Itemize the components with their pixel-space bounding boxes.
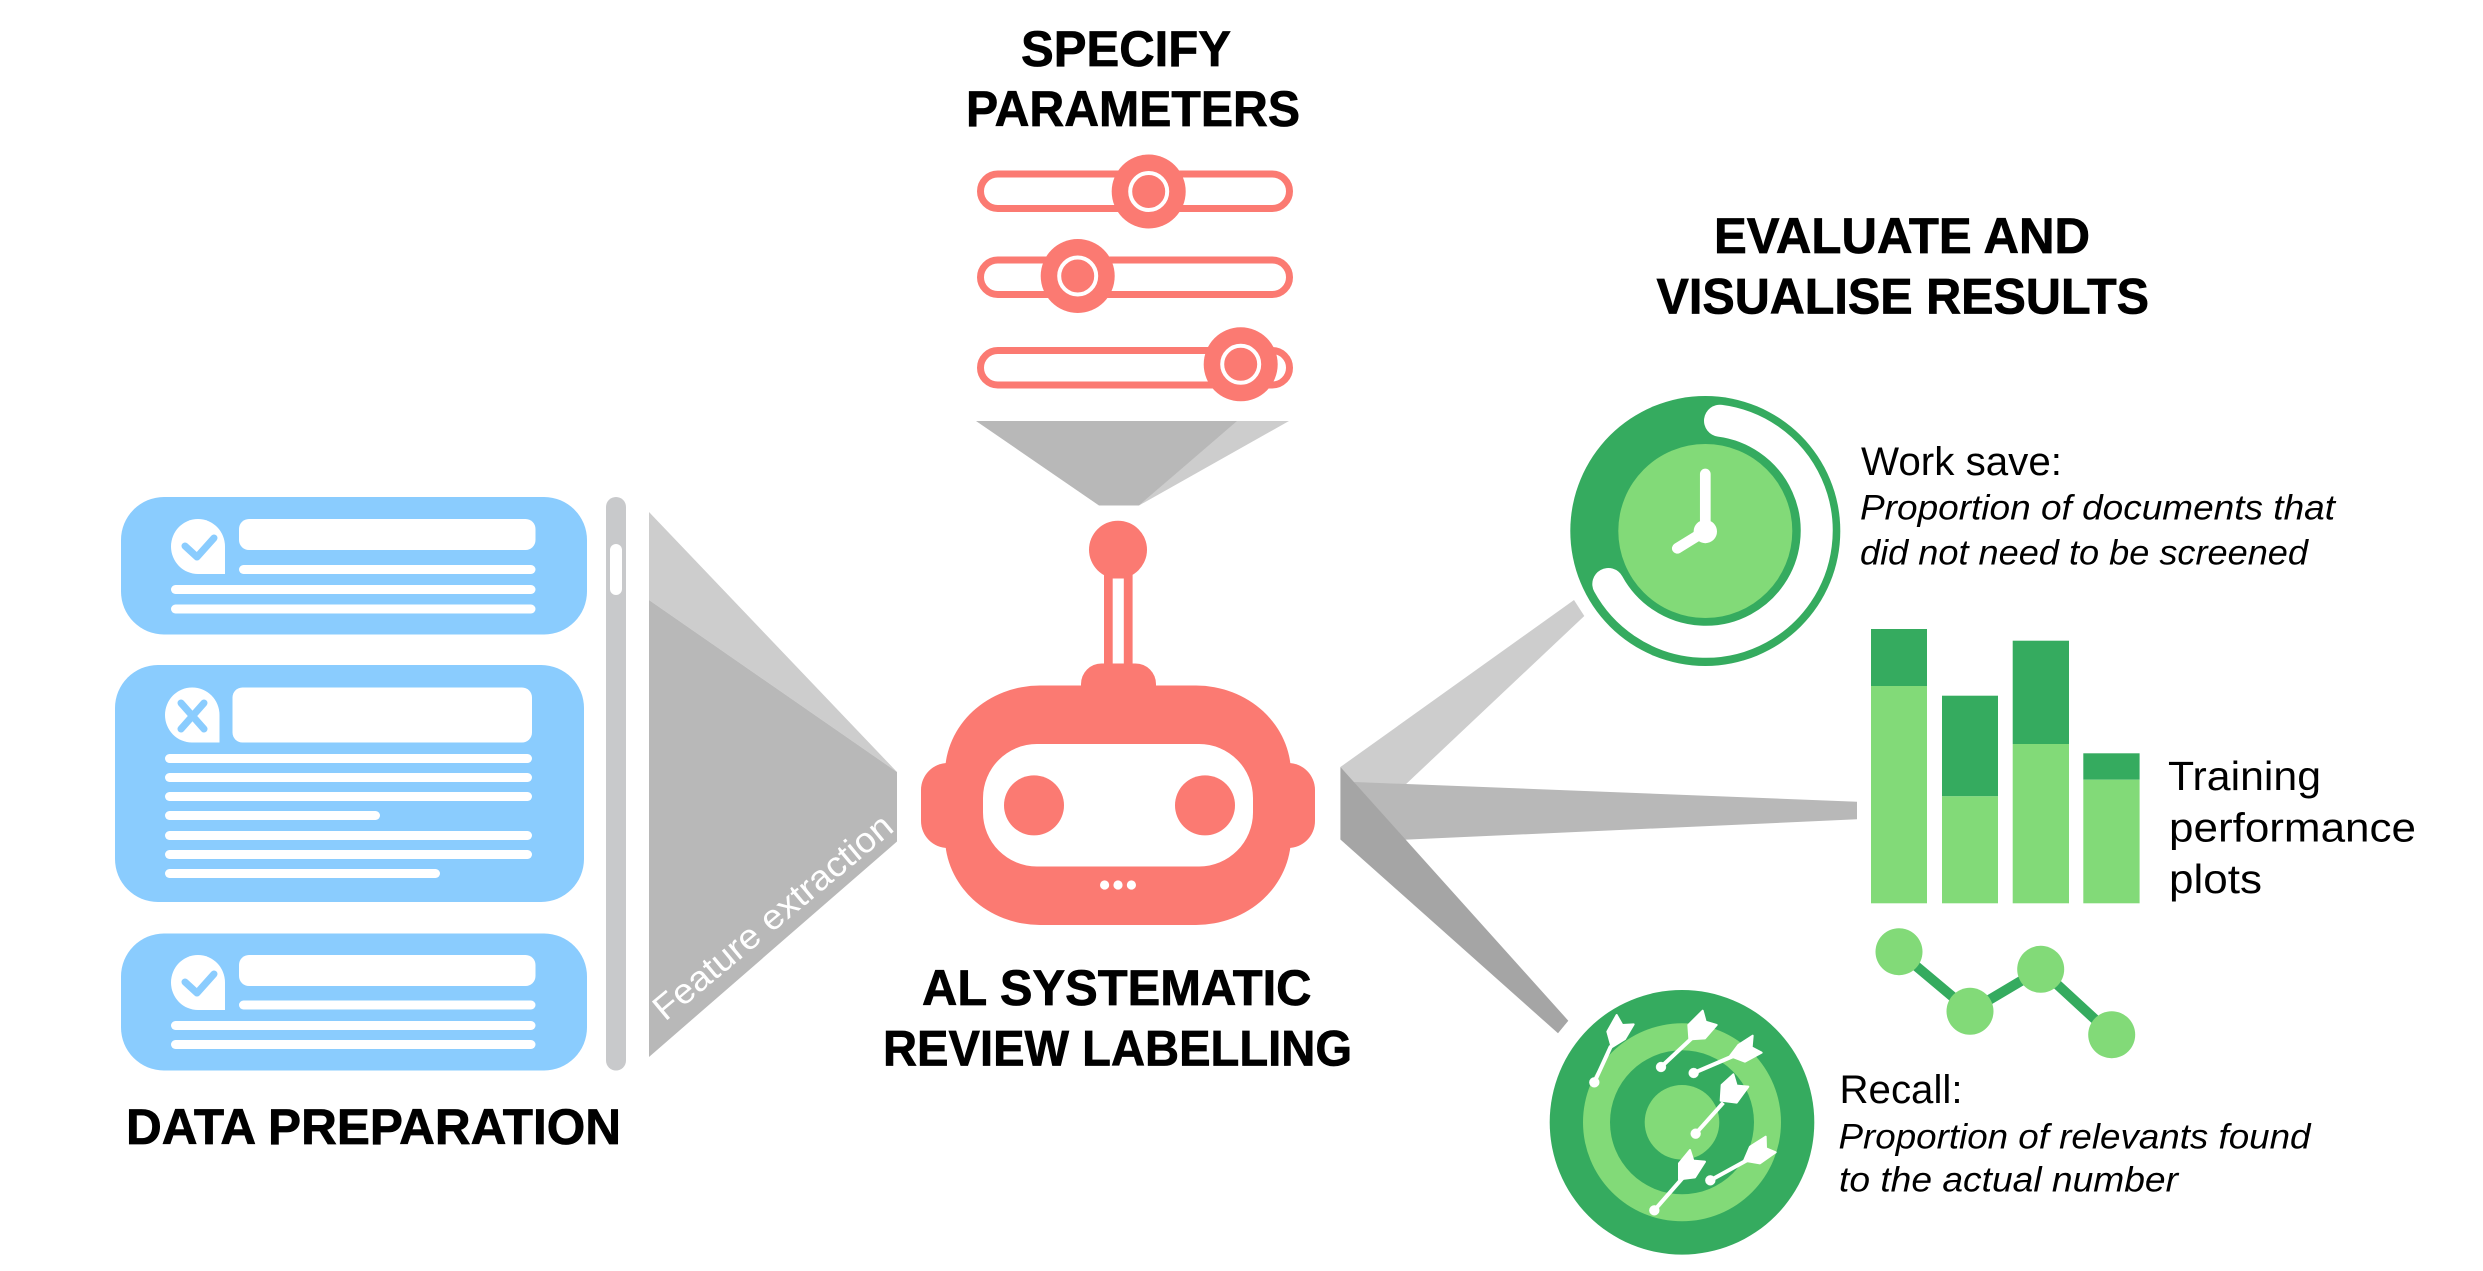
card: excluded document middle (115, 665, 584, 902)
heading: specify parameters: PARAMETERS (966, 81, 1300, 137)
heading: al systematic review labelling: AL SYSTEMATIC (922, 960, 1312, 1016)
heading: data preparation: DATA PREPARATION (126, 1099, 621, 1155)
text: training performance plots (2168, 753, 2416, 902)
text: recall: Proportion of relevants found (1838, 1117, 2312, 1156)
dart 3 (1689, 1036, 1762, 1078)
text: work save: Proportion of documents that (1860, 488, 2336, 528)
icon: target with darts (1550, 990, 1814, 1255)
robot icon (921, 521, 1315, 925)
bar chart (1871, 629, 2140, 903)
icon: clock work save (1570, 396, 1840, 666)
text: training performance plots: performance (2169, 805, 2416, 851)
text: work save (1860, 440, 2336, 572)
dart 1 (1589, 1015, 1634, 1087)
text: training performance plots: plots (2169, 856, 2262, 902)
dart 2 (1656, 1011, 1717, 1072)
heading: evaluate and visualise results (1656, 208, 2149, 324)
text: work save: Work save: (1861, 440, 2062, 484)
output arrows from robot (1340, 600, 1857, 1033)
slider 2 (980, 239, 1290, 313)
dart 4 (1691, 1074, 1748, 1139)
funnel: parameters into robot (976, 421, 1289, 506)
heading: al systematic review labelling (883, 960, 1352, 1076)
card: included document top (121, 497, 587, 634)
line chart (1876, 928, 2135, 1058)
card: included document bottom (121, 934, 587, 1070)
text: recall (1838, 1068, 2312, 1200)
slider 1 (980, 154, 1290, 228)
panel: specify parameters (966, 21, 1300, 506)
heading: specify parameters (966, 21, 1300, 137)
text: recall: Recall: (1840, 1068, 1962, 1112)
text: recall: to the actual number (1839, 1161, 2179, 1200)
heading: specify parameters: SPECIFY (1021, 21, 1231, 77)
label: feature extraction: Feature extraction (645, 806, 901, 1028)
heading: evaluate and visualise results: EVALUATE AND (1714, 208, 2090, 264)
text: work save: did not need to be screened (1860, 534, 2310, 572)
heading: al systematic review labelling: REVIEW LABELLING (883, 1020, 1352, 1076)
slider 3 (980, 327, 1290, 401)
dart 6 (1649, 1150, 1705, 1215)
funnel: feature extraction (645, 512, 901, 1057)
scrollbar (606, 497, 626, 1070)
dart 5 (1705, 1137, 1776, 1185)
panel: data preparation (115, 497, 626, 1155)
text: training performance plots: Training (2168, 753, 2321, 799)
heading: evaluate and visualise results: VISUALISE RESULTS (1656, 268, 2149, 324)
